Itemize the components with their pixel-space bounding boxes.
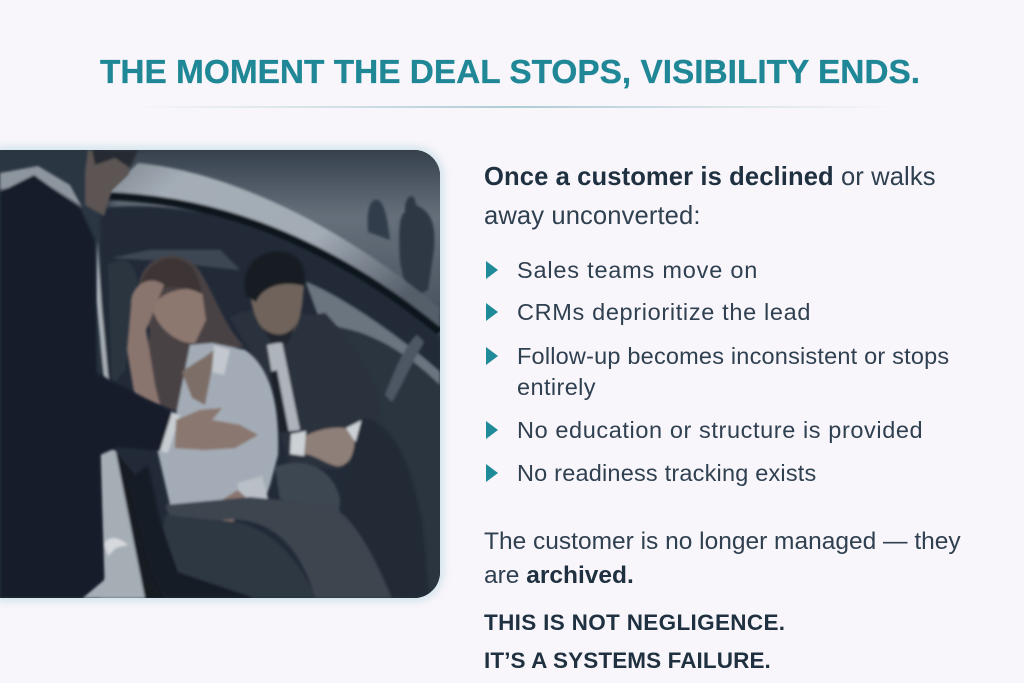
bullet: readiness: No readiness tracking exists (517, 460, 816, 486)
background lot (0, 140, 450, 598)
bullet: sales teams: Sales teams move on (517, 257, 758, 283)
bullet: CRMs: CRMs deprioritize the lead (517, 299, 811, 325)
door frame strip (96, 240, 109, 385)
intro text: away unconverted: (484, 202, 701, 230)
bullet: follow-up: Follow-up becomes inconsistent or stops (517, 343, 949, 369)
closing statement: The customer is no longer managed — they (484, 528, 961, 555)
conclusion callout: IT’S A SYSTEMS FAILURE. (484, 648, 771, 673)
photo: customers in car with salesperson (0, 150, 440, 598)
intro text (484, 163, 936, 230)
title divider (130, 106, 900, 108)
bullet: follow-up (486, 343, 949, 400)
bullet list (486, 257, 949, 486)
title: THE MOMENT THE DEAL STOPS, VISIBILITY ENDS. (100, 54, 920, 91)
man in passenger seat (230, 251, 430, 598)
bullet: education: No education or structure is provided (517, 417, 923, 443)
car body and interior (82, 163, 440, 600)
conclusion callout (484, 610, 785, 673)
closing statement (484, 528, 961, 589)
salesperson standing at door (0, 150, 258, 598)
woman in passenger seat (127, 255, 392, 598)
intro text: Once a customer is declined or walks (484, 163, 936, 191)
closing statement: are archived. (484, 562, 634, 589)
conclusion callout: THIS IS NOT NEGLIGENCE. (484, 610, 785, 635)
bullet: follow-up: entirely (517, 374, 596, 400)
